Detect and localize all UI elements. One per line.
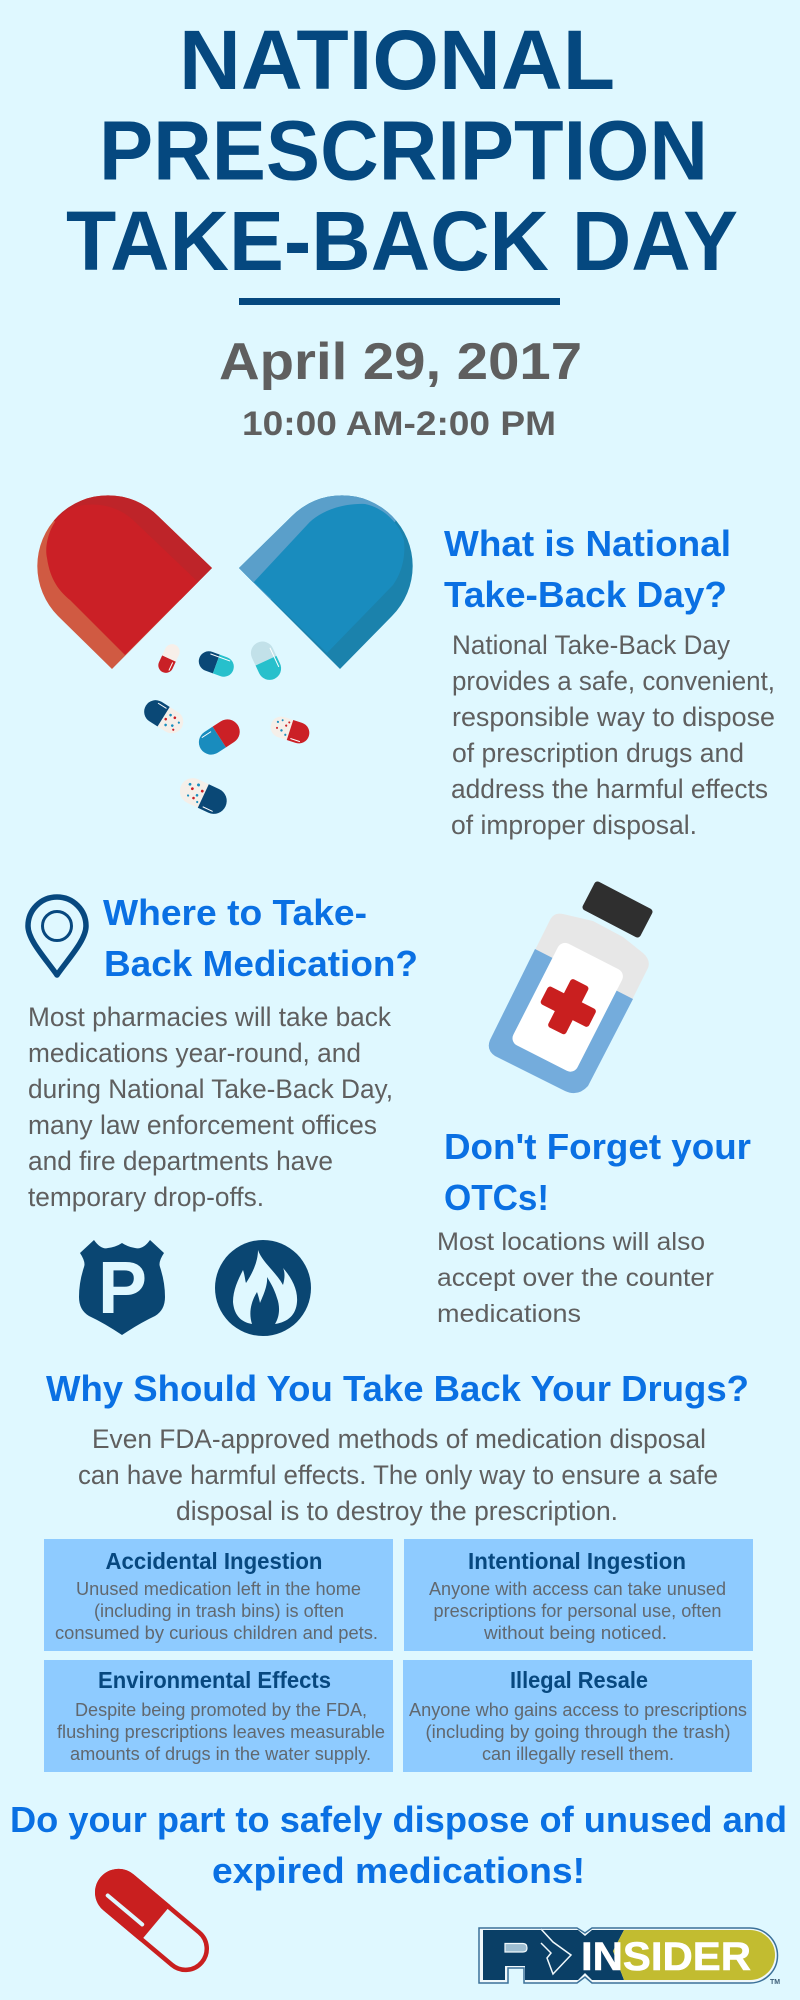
- small pill navy and teal: [196, 648, 237, 680]
- text: where to take back: [28, 1002, 393, 1212]
- heading: don't forget your otcs: Don't Forget your: [444, 1126, 751, 1167]
- text: what is take-back day: National Take-Back Day: [452, 630, 730, 660]
- text: where to take back: temporary drop-offs.: [28, 1182, 264, 1212]
- panel: intentional ingestion: Anyone with access can take unused: [429, 1579, 726, 1599]
- text: why intro: disposal is to destroy the prescription.: [176, 1496, 618, 1526]
- bottle label: [510, 940, 626, 1074]
- panel: accidental ingestion: Unused medication left in the home: [76, 1579, 361, 1599]
- small pill speckled and navy: [176, 774, 231, 818]
- text: otc medications: [437, 1228, 714, 1328]
- panel: illegal resale: Anyone who gains access to prescriptions: [409, 1700, 747, 1720]
- bottle body top: [535, 914, 649, 1000]
- heading: don't forget your otcs: [444, 1126, 751, 1218]
- panel: intentional ingestion: without being noticed.: [483, 1623, 667, 1643]
- panel: accidental ingestion: [44, 1539, 393, 1651]
- bottle body bottom: [489, 949, 633, 1093]
- icon: location pin: [28, 897, 86, 975]
- hero illustration: open capsule and pills: [30, 480, 422, 818]
- panel: intentional ingestion: [404, 1539, 753, 1651]
- logo: rx insider: TM: [770, 1979, 780, 1986]
- red capsule half: [37, 495, 212, 669]
- text: otc medications: Most locations will also: [437, 1228, 705, 1256]
- logo R counter: [505, 1944, 527, 1952]
- text: what is take-back day: address the harmful effects: [451, 774, 768, 804]
- heading: what is national take-back day: [444, 523, 731, 615]
- title: TAKE-BACK DAY: [66, 194, 738, 288]
- logo R arrow: [541, 1929, 571, 1974]
- panel: illegal resale: [403, 1660, 752, 1772]
- text: otc medications: accept over the counter: [437, 1264, 714, 1292]
- panel: environmental effects: Environmental Effects: [98, 1667, 331, 1693]
- title: PRESCRIPTION: [99, 104, 708, 198]
- date: April 29, 2017: [219, 333, 582, 391]
- closing call to action: Do your part to safely dispose of unused and: [10, 1799, 787, 1840]
- text: where to take back: Most pharmacies will take back: [28, 1002, 391, 1032]
- text: what is take-back day: [451, 630, 775, 840]
- heading: where to take-back medication: [103, 892, 418, 984]
- text: what is take-back day: of prescription drugs and: [452, 738, 744, 768]
- panel: illegal resale: (including by going through the trash): [426, 1722, 730, 1742]
- small pill white and red: [156, 642, 182, 675]
- time: 10:00 AM-2:00 PM: [242, 405, 556, 443]
- logo olive block: [613, 1930, 775, 1980]
- panel: intentional ingestion: prescriptions for personal use, often: [434, 1601, 722, 1621]
- panel: accidental ingestion: (including in trash bins) is often: [94, 1601, 344, 1621]
- bottle cap: [581, 880, 654, 939]
- red cross: [532, 970, 605, 1043]
- text: why intro: [78, 1424, 718, 1526]
- logo navy block: [483, 1930, 624, 1980]
- small pill navy and speckled: [140, 696, 188, 738]
- text: where to take back: many law enforcement offices: [28, 1110, 377, 1140]
- panel: environmental effects: [44, 1660, 393, 1772]
- text: what is take-back day: of improper disposal.: [451, 810, 697, 840]
- heading: why should you take back your drugs: Why Should You Take Back Your Drugs?: [46, 1368, 749, 1409]
- closing call to action: expired medications!: [212, 1850, 585, 1891]
- text: where to take back: during National Take-Back Day,: [28, 1074, 393, 1104]
- small pill blue and red: [194, 715, 244, 759]
- title: NATIONAL: [179, 13, 615, 107]
- heading: where to take-back medication: Back Medication?: [104, 943, 418, 984]
- text: where to take back: and fire departments have: [28, 1146, 333, 1176]
- text: otc medications: medications: [437, 1300, 581, 1328]
- text: what is take-back day: provides a safe, convenient,: [452, 666, 775, 696]
- panel: accidental ingestion: Accidental Ingestion: [106, 1548, 322, 1574]
- text: why intro: Even FDA-approved methods of medication disposal: [92, 1424, 706, 1454]
- title: [66, 13, 738, 288]
- icon: red capsule: [85, 1859, 217, 1980]
- closing call to action: [10, 1799, 787, 1891]
- heading: what is national take-back day: Take-Back Day?: [444, 574, 727, 615]
- icon: fire department: [215, 1240, 311, 1336]
- panel: illegal resale: can illegally resell them.: [482, 1744, 674, 1764]
- panel: environmental effects: Despite being promoted by the FDA,: [75, 1700, 367, 1720]
- heading: don't forget your otcs: OTCs!: [444, 1177, 549, 1218]
- icon: police badge: [79, 1240, 165, 1335]
- panel: illegal resale: Illegal Resale: [510, 1667, 648, 1693]
- icon: police badge: P: [98, 1246, 147, 1329]
- text: where to take back: medications year-round, and: [28, 1038, 361, 1068]
- logo outline: [479, 1928, 777, 1983]
- text: why intro: can have harmful effects. The only way to ensure a safe: [78, 1460, 718, 1490]
- icon: medicine bottle: [489, 880, 654, 1093]
- panel: accidental ingestion: consumed by curious children and pets.: [55, 1623, 378, 1643]
- panel: environmental effects: amounts of drugs in the water supply.: [70, 1744, 371, 1764]
- small pill speckled and red: [268, 714, 312, 746]
- panel: intentional ingestion: Intentional Ingestion: [468, 1548, 686, 1574]
- small pill light blue and teal: [247, 638, 285, 684]
- text: what is take-back day: responsible way to dispose: [452, 702, 775, 732]
- heading: what is national take-back day: What is National: [444, 523, 731, 564]
- logo: rx insider: [479, 1928, 780, 1986]
- heading: where to take-back medication: Where to Take-: [103, 892, 367, 933]
- panel: environmental effects: flushing prescriptions leaves measurable: [57, 1722, 385, 1742]
- logo: rx insider: INSIDER: [581, 1935, 751, 1979]
- blue capsule half: [239, 495, 413, 669]
